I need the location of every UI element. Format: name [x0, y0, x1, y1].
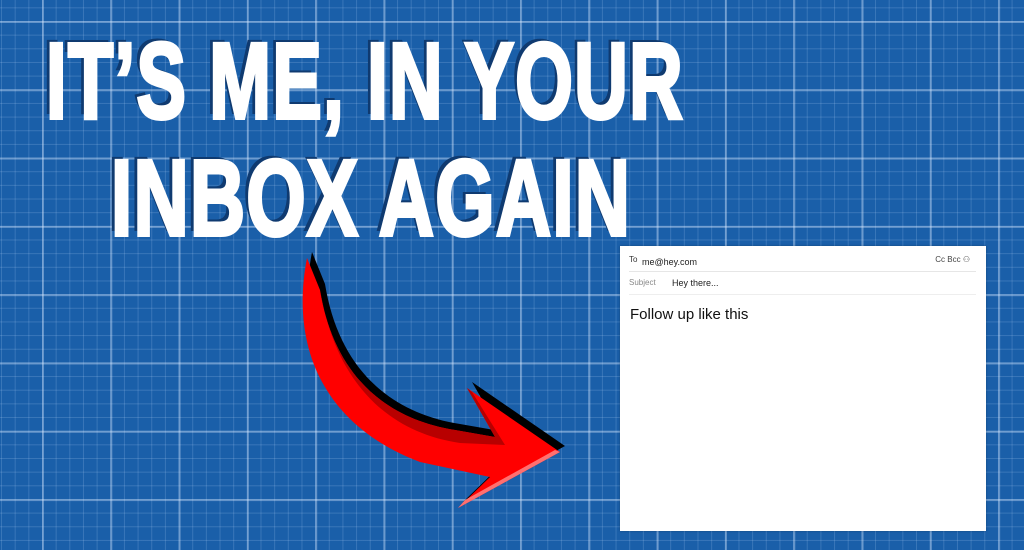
cc bcc: Cc Bcc ⚇ [935, 255, 970, 264]
title line 2: INBOX AGAIN [111, 137, 631, 258]
email compose panel [620, 246, 986, 531]
to field: To [629, 255, 637, 264]
title line 1: IT’S ME, IN YOUR [46, 20, 684, 141]
body text: Follow up like this [630, 306, 748, 323]
email compose panel: Hey there... [672, 278, 719, 288]
title [46, 20, 684, 258]
email compose panel: me@hey.com [642, 257, 697, 267]
subject field: Subject [629, 278, 656, 287]
